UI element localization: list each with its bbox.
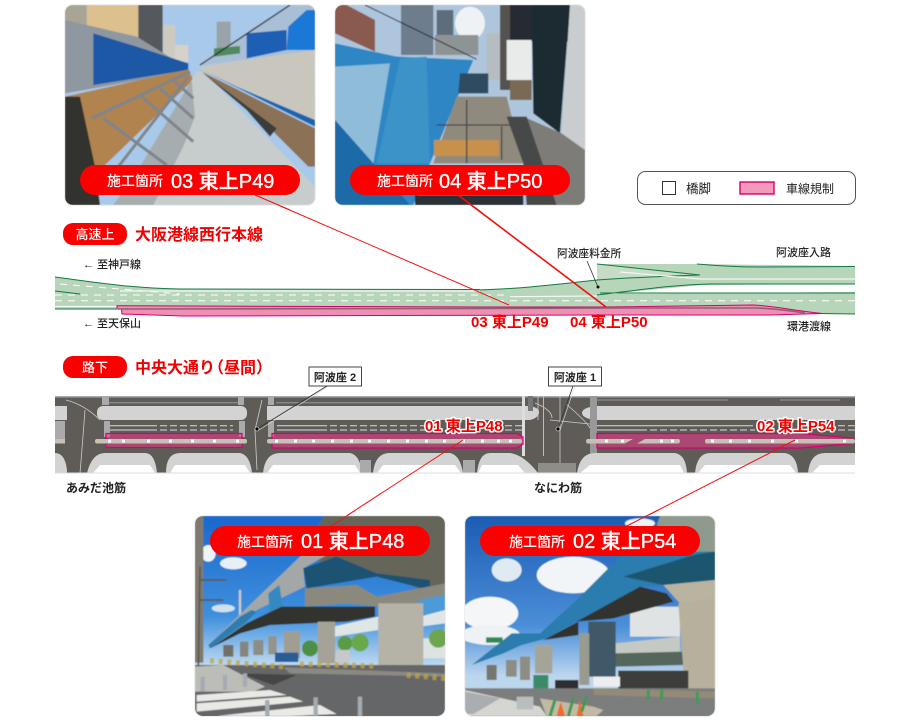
- direction label: Tempozan: ← 至天保山: [83, 316, 141, 330]
- label pill: [350, 165, 570, 195]
- site label 01: 01 東上P48: [425, 418, 503, 435]
- heading: elevated section: 高速上: [75, 227, 115, 242]
- street label: Naniwa: なにわ筋: [534, 480, 582, 495]
- pier markers: [108, 440, 846, 442]
- label: Awaza entrance: 阿波座入路: [776, 245, 831, 259]
- photo: 04 東上P50: [334, 4, 586, 212]
- site label 03: 03 東上P49: [471, 314, 549, 331]
- heading: road level section: [63, 356, 272, 378]
- legend item: lane restriction: [740, 181, 834, 196]
- direction label: Kobe line: ← 至神戸線: [83, 257, 141, 271]
- heading: road level section: 中央大通り（昼間）: [135, 359, 272, 377]
- label pill: 施工箇所: [107, 173, 163, 189]
- street label: Amida-ike: あみだ池筋: [66, 480, 126, 495]
- road-level map: [55, 396, 855, 474]
- label pill: 施工箇所: [237, 534, 293, 550]
- callout: Awaza 2: 阿波座 2: [314, 370, 356, 384]
- photo: 03 東上P49: [64, 4, 316, 210]
- site label 02: 02 東上P54: [757, 418, 835, 435]
- label pill: 施工箇所: [377, 173, 433, 189]
- elevated road map: [55, 264, 855, 316]
- photo: 01 東上P48: [194, 510, 448, 717]
- callout: Awaza 1: [548, 367, 602, 431]
- callout: Awaza 1: 阿波座 1: [554, 370, 596, 384]
- lane restriction: pink band on elevated road: [117, 305, 822, 316]
- building blocks: [55, 453, 855, 473]
- heading: elevated section: 大阪港線西行本線: [135, 225, 263, 244]
- label: Awaza tollgate: [557, 247, 621, 288]
- label pill: 施工箇所: [509, 534, 565, 550]
- callout: Awaza 2: [255, 367, 362, 431]
- label pill: 02 東上P54: [573, 530, 676, 553]
- label pill: 01 東上P48: [301, 530, 404, 553]
- legend: [638, 172, 856, 204]
- heading: road level section: 路下: [82, 360, 108, 375]
- legend item: pier: 橋脚: [686, 181, 711, 196]
- label pill: 03 東上P49: [171, 170, 274, 193]
- label pill: [210, 526, 430, 556]
- median bars: [55, 439, 855, 444]
- legend item: pier: [662, 181, 711, 196]
- legend item: lane restriction: 車線規制: [786, 181, 834, 196]
- label pill: [480, 526, 700, 556]
- label pill: [80, 165, 300, 195]
- label: Kanko connector: 環港渡線: [787, 319, 831, 333]
- leader lines: [255, 195, 795, 526]
- photo: 02 東上P54: [460, 510, 716, 717]
- label pill: 04 東上P50: [439, 170, 542, 193]
- label: Awaza tollgate: 阿波座料金所: [557, 247, 621, 260]
- heading: elevated section: [63, 223, 263, 245]
- site label 04: 04 東上P50: [570, 314, 648, 331]
- lane restriction: pink bands on road level: [106, 434, 853, 448]
